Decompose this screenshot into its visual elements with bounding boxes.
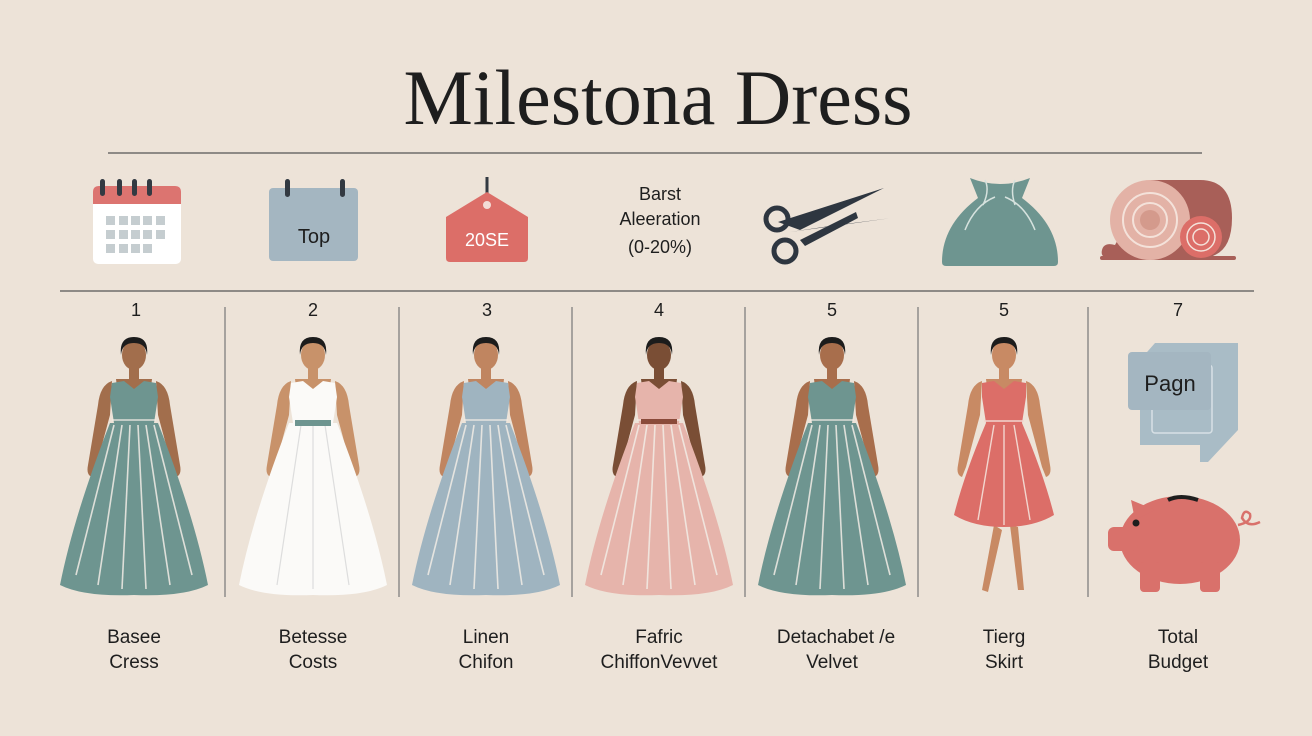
labels: Chifon [459, 652, 513, 673]
column dividers [225, 307, 1088, 597]
labels: Budget [1148, 652, 1209, 673]
figure 2: white gown [239, 337, 387, 595]
step numbers: 5 [827, 300, 837, 320]
figure 1: teal gown [60, 337, 208, 595]
figure 4: pink gown [585, 337, 733, 595]
labels: Skirt [985, 652, 1024, 673]
icon: calendar [93, 179, 181, 264]
labels: ChiffonVevvet [601, 652, 718, 673]
icon: scissors [766, 188, 892, 262]
labels: Detachabet /e [777, 627, 895, 648]
step numbers: 5 [999, 300, 1009, 320]
text: alteration: Aleeration [619, 209, 701, 229]
icon: price tag [446, 177, 528, 262]
step numbers: 2 [308, 300, 318, 320]
step numbers [131, 300, 1183, 320]
labels: Linen [463, 627, 509, 648]
icon: price tag: 20SE [465, 230, 509, 250]
labels [107, 627, 1209, 673]
icon: top calendar: Top [298, 226, 330, 248]
icon: pagn document: Pagn [1144, 371, 1196, 396]
figure 6: short red skirt [954, 337, 1054, 592]
labels: Total [1158, 627, 1198, 648]
step numbers: 1 [131, 300, 141, 320]
text: alteration: Barst [639, 184, 681, 204]
labels: Tierg [983, 627, 1025, 648]
labels: Basee [107, 627, 161, 648]
labels: Velvet [806, 652, 859, 673]
title: Milestona Dress [403, 54, 913, 141]
step numbers: 4 [654, 300, 664, 320]
labels: Fafric [635, 627, 683, 648]
figure 5: teal gown [758, 337, 906, 595]
icon: piggy bank [1108, 496, 1260, 592]
icon: pagn document [1128, 343, 1238, 462]
labels: Cress [109, 652, 159, 673]
text: alteration [619, 184, 701, 257]
labels: Betesse [279, 627, 347, 648]
icon: pouch [942, 178, 1058, 266]
step numbers: 7 [1173, 300, 1183, 320]
text: alteration: (0-20%) [628, 237, 692, 257]
step numbers: 3 [482, 300, 492, 320]
icon: top calendar [269, 179, 358, 261]
labels: Costs [289, 652, 337, 673]
icon: fabric roll [1100, 180, 1236, 260]
figure 3: blue gown [412, 337, 560, 595]
